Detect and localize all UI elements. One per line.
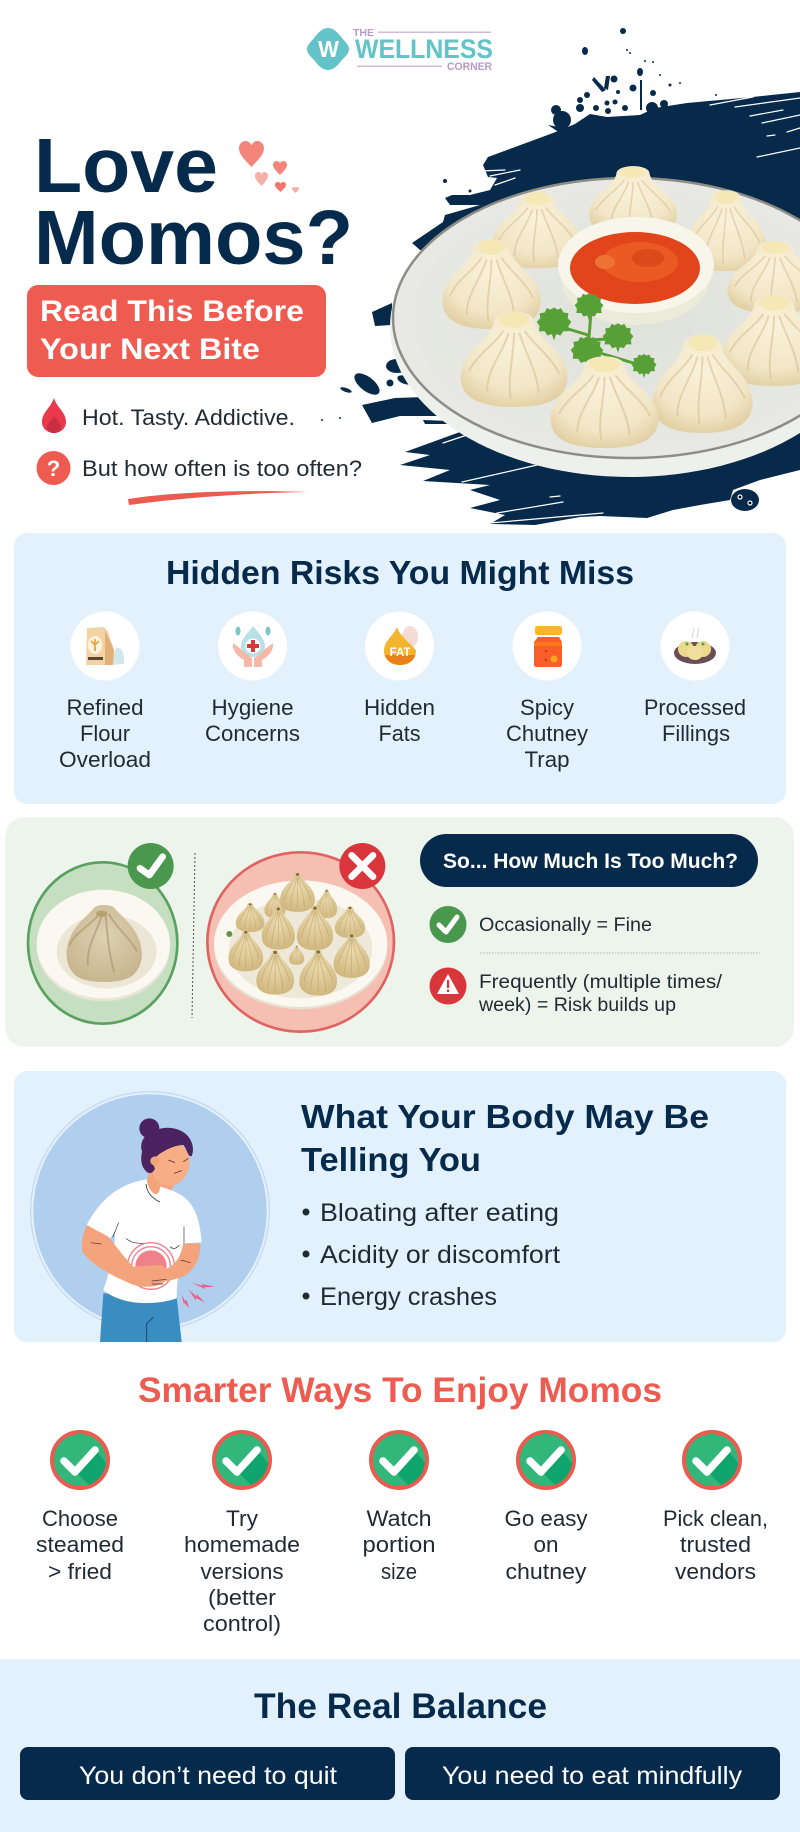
symptom list xyxy=(302,1199,560,1311)
illustration: single momo plate xyxy=(28,843,177,1024)
plate xyxy=(390,177,800,477)
tip: go easy on chutney: chutney xyxy=(506,1559,587,1584)
risk: processed fillings: Fillings xyxy=(662,721,730,746)
tip: steamed over fried: Choose xyxy=(42,1506,118,1531)
tip: homemade xyxy=(184,1432,300,1636)
icon: question mark: ? xyxy=(47,456,60,481)
tip: portion size: size xyxy=(381,1559,417,1584)
panel: body signals xyxy=(14,1071,786,1342)
tip: steamed over fried xyxy=(36,1432,124,1584)
text: how often: But how often is too often? xyxy=(82,456,362,481)
text: frequently: Frequently (multiple times/ xyxy=(479,972,723,993)
risk: hygiene: Concerns xyxy=(205,721,300,746)
risk: processed fillings: Processed xyxy=(644,695,746,720)
underline swoosh xyxy=(128,491,308,505)
heading: hidden risks: Hidden Risks You Might Miss xyxy=(166,554,634,591)
heading: the real balance: The Real Balance xyxy=(254,1687,547,1726)
tip: portion size: Watch xyxy=(366,1506,432,1531)
icon: warning xyxy=(430,968,466,1004)
symptom list: Bloating after eating xyxy=(320,1199,559,1227)
divider: dotted xyxy=(192,853,195,1018)
tip: portion size: portion xyxy=(362,1532,436,1557)
risk: refined flour: Flour xyxy=(80,721,130,746)
risk: spicy chutney: Spicy xyxy=(520,695,574,720)
front momos xyxy=(461,311,753,448)
risk: spicy chutney xyxy=(506,612,588,772)
risk: hidden fats: Fats xyxy=(378,721,420,746)
risk: spicy chutney: Chutney xyxy=(506,721,588,746)
risk: refined flour: Overload xyxy=(59,747,151,772)
side momos xyxy=(442,239,800,386)
brush streaks in the splash xyxy=(443,97,800,523)
tip: trusted vendors xyxy=(663,1432,768,1584)
logo: The Wellness Corner xyxy=(307,28,493,73)
button: eat mindfully: You need to eat mindfully xyxy=(442,1762,743,1790)
panel: hidden risks xyxy=(14,533,786,804)
title: Love xyxy=(34,123,218,209)
momo plate photo xyxy=(390,166,800,477)
risk: refined flour: Refined xyxy=(66,695,144,720)
panel: the real balance xyxy=(0,1659,800,1832)
title: Momos? xyxy=(34,195,353,281)
panel: how much is too much xyxy=(5,817,794,1047)
text: frequently xyxy=(478,972,723,1016)
tip: go easy on chutney xyxy=(504,1432,588,1584)
tip: go easy on chutney: on xyxy=(534,1532,558,1557)
icon: flame xyxy=(42,398,66,433)
heading: body signals: Telling You xyxy=(301,1141,481,1178)
tip: portion size xyxy=(362,1432,436,1584)
back momos xyxy=(492,166,766,271)
risk: refined flour xyxy=(59,612,151,772)
ink splash behind the plate xyxy=(321,28,800,525)
text: occasionally: Occasionally = Fine xyxy=(479,915,652,936)
icon: question mark xyxy=(36,451,70,485)
risk: hidden fats: FAT xyxy=(390,647,410,659)
tip: homemade: (better xyxy=(208,1585,277,1610)
chutney bowl xyxy=(558,217,714,325)
tip: trusted vendors: trusted xyxy=(680,1532,751,1557)
tip: trusted vendors: Pick clean, xyxy=(663,1506,768,1531)
logo: The Wellness Corner: WELLNESS xyxy=(355,34,493,64)
heading: body signals xyxy=(301,1098,709,1178)
risk: hidden fats xyxy=(364,612,435,746)
illustration: crowded momo plate xyxy=(207,843,394,1032)
tip: homemade: homemade xyxy=(184,1532,300,1557)
risk: hygiene xyxy=(205,612,300,746)
tip: trusted vendors: vendors xyxy=(675,1559,756,1584)
title xyxy=(34,123,353,281)
button: do not need to quit xyxy=(20,1747,395,1800)
symptom list: Energy crashes xyxy=(320,1283,497,1311)
symptom list: Acidity or discomfort xyxy=(320,1241,560,1269)
risk: spicy chutney: Trap xyxy=(524,747,570,772)
icon: green check xyxy=(430,906,466,943)
subtitle banner: Your Next Bite xyxy=(40,333,260,366)
tip: steamed over fried: > fried xyxy=(48,1559,112,1584)
text: hot tasty addictive: Hot. Tasty. Addictive. xyxy=(82,405,295,430)
button: eat mindfully xyxy=(405,1747,780,1800)
button: do not need to quit: You don’t need to quit xyxy=(79,1762,337,1790)
subtitle banner: Read This Before xyxy=(40,295,304,328)
logo: The Wellness Corner: W xyxy=(318,36,339,62)
illustration: woman with stomach ache xyxy=(31,1092,269,1342)
cilantro garnish xyxy=(537,293,656,378)
tip: homemade: versions xyxy=(200,1559,284,1584)
tip: homemade: control) xyxy=(203,1611,281,1636)
pill heading: So... How Much Is Too Much? xyxy=(443,850,738,873)
logo: The Wellness Corner: THE xyxy=(353,28,374,39)
subtitle banner xyxy=(27,285,326,377)
tip: steamed over fried: steamed xyxy=(36,1532,124,1557)
logo: The Wellness Corner: CORNER xyxy=(447,61,492,73)
tip: homemade: Try xyxy=(226,1506,259,1531)
risk: hygiene: Hygiene xyxy=(212,695,294,720)
risk: processed fillings xyxy=(644,612,746,746)
heading: body signals: What Your Body May Be xyxy=(301,1098,709,1135)
tip: go easy on chutney: Go easy xyxy=(504,1506,588,1531)
text: frequently: week) = Risk builds up xyxy=(478,995,676,1016)
hearts xyxy=(239,141,299,193)
heading: smarter ways: Smarter Ways To Enjoy Momos xyxy=(138,1371,662,1410)
pill heading xyxy=(420,834,758,887)
risk: hidden fats: Hidden xyxy=(364,695,435,720)
